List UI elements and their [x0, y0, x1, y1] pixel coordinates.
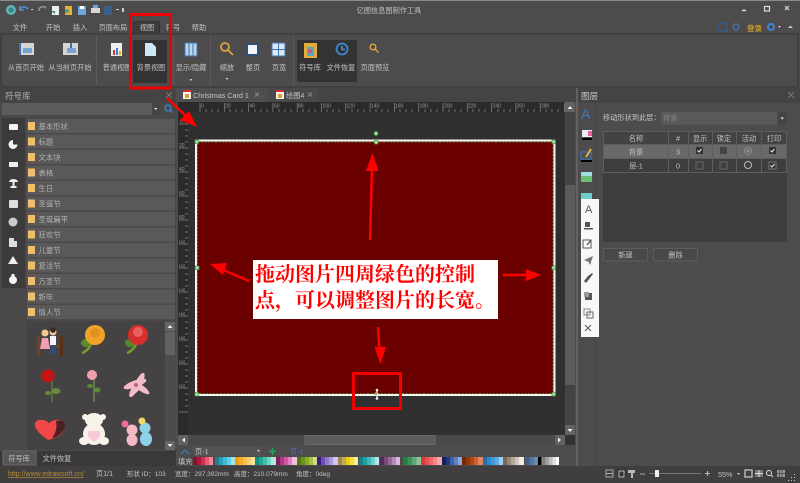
background page: [195, 132, 556, 400]
symbol: red long stem rose: [42, 370, 60, 402]
menu bar: 页面布局: [99, 23, 127, 32]
top ruler: 260: [516, 104, 525, 110]
ribbon labels: 整页: [246, 63, 260, 72]
ribbon labels: 文件恢复: [327, 63, 355, 72]
view and zoom controls: [606, 469, 795, 481]
top ruler: 280: [541, 104, 550, 110]
status bar: 高度：210.079mm: [234, 469, 288, 478]
callout: drag instructions: 拖动图片四周绿色的控制: [255, 258, 475, 287]
left ruler: 220: [178, 383, 186, 388]
category list: 狂欢节: [38, 230, 61, 240]
canvas area: [178, 102, 565, 435]
menu bar: [13, 22, 793, 34]
highlight: background view button: [130, 14, 170, 88]
callout: drag instructions: [253, 258, 498, 319]
top ruler: 220: [468, 104, 477, 110]
gallery scrollbar: [165, 322, 175, 450]
panel tabs: symbols and recovery: [0, 451, 176, 466]
layers table: [603, 131, 787, 242]
icon: resize cursor: [374, 389, 378, 400]
layer selector: 背景: [663, 114, 677, 122]
left ruler: 160: [178, 311, 186, 316]
left ruler: 0: [180, 119, 183, 125]
table header: 活动: [742, 134, 756, 143]
status bar: 宽度：297.392mm: [175, 469, 229, 478]
category list: 圣诞扁平: [38, 215, 68, 224]
icon: application logo: [6, 5, 16, 15]
tab: Christmas Card 1: Christmas Card 1: [193, 91, 249, 100]
icon: file recovery: [336, 44, 348, 54]
button: delete layer: 删除: [668, 250, 683, 260]
quick access toolbar: [20, 5, 124, 15]
category list: 表格: [38, 168, 54, 178]
left ruler: 40: [179, 167, 185, 173]
application title: 亿图信息图制作工具: [357, 6, 421, 15]
menu bar: 文件: [13, 23, 27, 32]
icon: page width: [272, 43, 285, 56]
left ruler: 180: [178, 335, 186, 340]
status bar: http://www.edrawsoft.cn/: [8, 471, 84, 478]
category list: 圣诞节: [38, 200, 61, 208]
category list: 复活节: [38, 262, 61, 270]
title bar: [0, 1, 800, 21]
status bar: [0, 466, 800, 483]
layer selector: [603, 112, 787, 124]
top ruler: 240: [492, 104, 501, 110]
tab: drawing 4: 绘图4: [286, 91, 304, 100]
top ruler: 100: [322, 104, 331, 110]
color palette: [178, 457, 559, 466]
canvas scrollbars: [178, 102, 575, 445]
table header: 锁定: [717, 134, 731, 143]
button: new layer: [604, 248, 648, 261]
ribbon labels: 页宽: [272, 63, 286, 72]
ribbon: [1, 34, 798, 87]
icon: start from current page: [63, 43, 78, 55]
icon: symbol library: [304, 43, 317, 58]
category list: 文本块: [38, 153, 61, 162]
symbol: teddy bear: [79, 413, 109, 445]
control handles: [195, 132, 556, 396]
account controls: [718, 23, 793, 33]
floating white toolbar: A: [585, 204, 593, 216]
ribbon labels: [8, 63, 389, 72]
ribbon labels: 从当前页开始: [48, 63, 92, 72]
icon: full page: [246, 43, 259, 56]
page tab row: 页-1: [195, 447, 209, 456]
status bar: 形状 ID：103: [127, 469, 166, 478]
row: background layer: [629, 147, 776, 156]
arrow: pointing to page corner: [167, 98, 197, 127]
callout: drag instructions: 点，可以调整图片的长宽。: [255, 284, 495, 313]
arrow: pointing up: [366, 153, 378, 240]
icon: page preview: [367, 42, 381, 56]
highlight: bottom resize handle: [354, 374, 400, 408]
symbol gallery: [27, 321, 175, 450]
button: new layer: 新建: [618, 250, 633, 260]
view and zoom controls: 55%: [718, 470, 733, 479]
left ruler: 100: [178, 239, 186, 244]
table header: 打印: [767, 134, 781, 143]
top ruler: 160: [395, 104, 404, 110]
top ruler: 140: [371, 104, 380, 110]
status bar: 页1/1: [96, 469, 113, 478]
layer selector: 移动形状到此层：: [603, 113, 661, 122]
left ruler: 20: [179, 143, 185, 149]
category list: 情人节: [38, 308, 61, 317]
panel heading: 图层: [581, 91, 598, 101]
menu bar: 帮助: [192, 23, 206, 32]
ribbon labels: 普通视图: [103, 63, 131, 72]
ribbon labels: 从首页开始: [8, 63, 44, 72]
ribbon labels: 符号库: [299, 63, 321, 72]
symbol: couple on bench: [37, 327, 63, 356]
category list: [27, 119, 175, 319]
page tab row: 页-1: [290, 447, 304, 456]
panel: symbol library: [0, 88, 176, 466]
menu bar: 符号: [166, 23, 180, 32]
top ruler: 180: [420, 104, 428, 110]
document tabs: [176, 88, 577, 103]
top ruler: 120: [346, 104, 355, 110]
panel tabs: symbols and recovery: 文件恢复: [43, 454, 71, 463]
panel tabs: symbols and recovery: 符号库: [8, 454, 30, 463]
left ruler: 60: [179, 191, 185, 197]
row: background layer: 背景: [629, 148, 643, 156]
color palette: 填充: [178, 457, 192, 466]
top ruler: 0: [201, 104, 204, 110]
category icon column: [2, 118, 25, 288]
page tab row: [176, 445, 577, 456]
ribbon labels: 显示/隐藏: [176, 63, 206, 72]
row: layer 1: 层-1: [629, 162, 643, 170]
top ruler: 200: [444, 104, 453, 110]
symbol: lily: [123, 372, 151, 398]
ribbon labels: 背景视图: [137, 63, 165, 72]
top ruler: 80: [298, 104, 304, 110]
row: layer 1: [629, 162, 776, 170]
category list: 儿童节: [38, 246, 61, 255]
floating white toolbar: [581, 199, 599, 337]
left ruler: 200: [178, 359, 186, 364]
panel heading: 符号库: [5, 91, 31, 101]
ribbon labels: 页面预览: [361, 63, 389, 72]
tab: Christmas Card 1: [183, 90, 259, 100]
account controls: 登录: [747, 23, 762, 33]
panel heading: [578, 88, 800, 103]
row: background layer: 3: [676, 148, 680, 156]
active tab: 视图: [134, 22, 160, 34]
panel: layers: [576, 88, 800, 466]
symbol: yellow rose: [81, 325, 105, 353]
menu bar: 开始: [46, 23, 60, 32]
side tool icons: A: [581, 106, 591, 122]
panel heading: [0, 88, 176, 103]
table header: #: [676, 134, 680, 143]
arrow: pointing right: [503, 269, 541, 281]
arrow: pointing left: [210, 263, 249, 281]
left ruler: [178, 112, 188, 435]
symbol: red rose: [125, 325, 148, 353]
ribbon labels: 缩放: [220, 63, 234, 72]
top ruler: 60: [274, 104, 280, 110]
left ruler: 140: [178, 287, 186, 292]
icon: zoom: [221, 43, 233, 80]
top ruler: 40: [250, 104, 255, 110]
menu bar: 视图: [140, 23, 154, 32]
category list: 万圣节: [38, 277, 61, 286]
status bar: 角度：0deg: [296, 469, 330, 478]
window controls: [742, 6, 789, 11]
symbol: heart: [35, 420, 65, 440]
table header: 名称: [629, 134, 643, 143]
arrow: pointing down: [374, 327, 386, 364]
tab: drawing 4: [276, 90, 312, 100]
symbol: two small bears: [122, 418, 152, 446]
table header: [629, 134, 781, 143]
left ruler: 120: [178, 263, 186, 268]
icon: start from first page: [19, 43, 34, 55]
icon: show or hide: [185, 43, 197, 81]
icon: normal view: [111, 43, 122, 56]
symbol: pink long stem rose: [87, 370, 100, 402]
left ruler: 80: [179, 215, 185, 221]
menu bar: 插入: [73, 23, 87, 32]
category list: 标题: [38, 138, 54, 146]
table header: 显示: [693, 134, 707, 143]
top ruler: 20: [225, 104, 231, 110]
side tool icons: [581, 106, 592, 199]
icon: background view: [145, 43, 156, 56]
category list: 生日: [38, 184, 53, 193]
category list: 基本形状: [38, 122, 69, 131]
button: delete layer: [654, 248, 698, 261]
search box: [2, 103, 172, 115]
row: layer 1: 0: [676, 162, 680, 170]
category list: 新年: [38, 292, 54, 302]
top ruler: [178, 102, 565, 112]
